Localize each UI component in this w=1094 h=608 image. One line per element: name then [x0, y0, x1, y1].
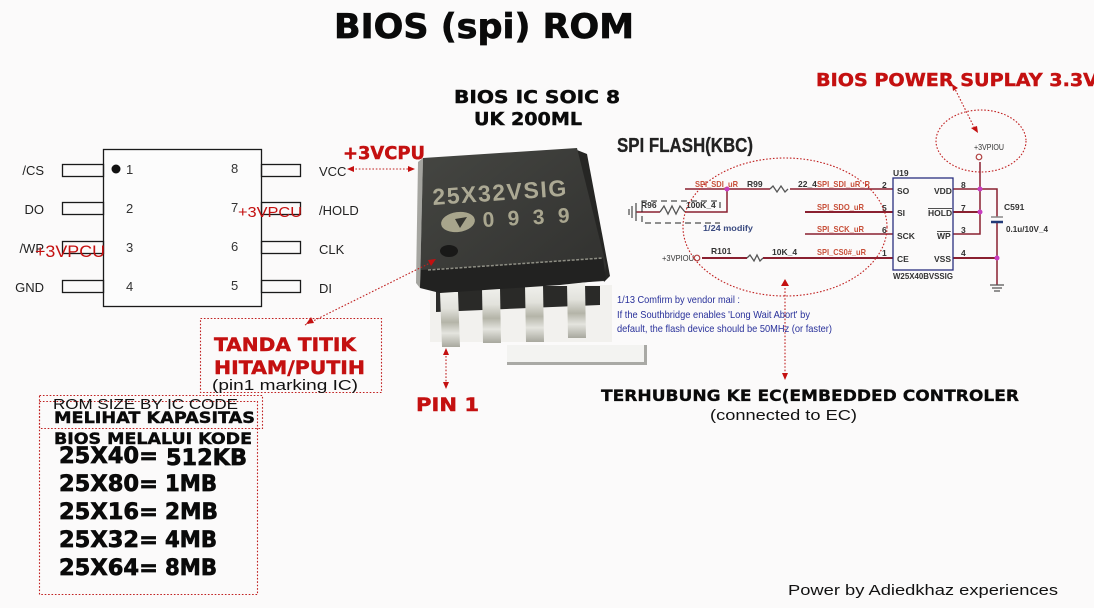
row 25X16: 2MB — [165, 500, 218, 525]
arrow: power supply — [952, 84, 978, 133]
chip side shadow — [577, 150, 610, 282]
U19 chip — [893, 178, 953, 270]
callout: pin 1 marking: HITAM/PUTIH — [214, 358, 365, 379]
chip photo illustration — [416, 148, 647, 365]
U19 pin names: HOLD — [928, 208, 952, 218]
pin numbers — [882, 180, 966, 258]
schematic title: SPI FLASH(KBC) — [617, 135, 753, 157]
row 25X32: 4MB — [165, 528, 217, 553]
Indonesian heading line 2: BIOS MELALUI KODE — [54, 429, 252, 448]
right pin names: VCC — [319, 164, 346, 179]
arrow: to EC — [781, 279, 789, 380]
+3VPCU label pin 3: +3VPCU — [35, 242, 105, 261]
pin 1 dot — [112, 164, 120, 174]
power net labels: +3VPIOU — [662, 254, 694, 263]
outer frame — [40, 402, 258, 594]
part labels: R96 — [641, 200, 657, 210]
pin numbers: 4 — [126, 279, 133, 294]
signal names — [695, 179, 870, 257]
part labels: R101 — [711, 246, 732, 256]
row 25X80: 25X80= — [59, 472, 158, 497]
pin numbers: 3 — [126, 240, 133, 255]
part labels: C591 — [1004, 202, 1025, 212]
PIN 1 label: PIN 1 — [416, 394, 479, 416]
resistors — [660, 186, 788, 261]
U19 pin names: CE — [897, 254, 909, 264]
U19 pin names — [897, 186, 952, 264]
row 25X16: 25X16= — [59, 500, 158, 525]
pin numbers: 5 — [231, 278, 238, 293]
arrow: VCC to chip — [347, 166, 415, 172]
power supply heading: BIOS POWER SUPLAY 3.3V — [816, 70, 1094, 91]
panel: SPI flash schematic — [617, 110, 1048, 335]
pin numbers: 7 — [231, 200, 238, 215]
left pin names: /CS — [22, 163, 44, 178]
power terminals — [694, 154, 982, 261]
chip pin 1 mark — [440, 245, 458, 257]
blue vendor note — [617, 294, 832, 335]
chip date code: 0939 — [482, 204, 570, 232]
EC caption — [601, 386, 1019, 424]
power net labels — [662, 143, 1004, 263]
pin numbers: 7 — [961, 203, 966, 213]
left pin names: GND — [15, 280, 44, 295]
part labels: U19 — [893, 168, 909, 178]
part labels: 10K_4 — [772, 247, 797, 257]
part labels: 100K_4 — [686, 200, 716, 210]
right pins — [262, 164, 300, 292]
U19 pin names: WP — [937, 231, 951, 241]
capacitor — [991, 216, 1003, 218]
+3VPCU label pin 7: +3VPCU — [238, 204, 302, 221]
pin numbers: 8 — [961, 180, 966, 190]
signal names: SPI_SDO_uR — [817, 202, 864, 212]
left pin names — [15, 163, 44, 295]
left pins — [62, 164, 104, 292]
part labels: W25X40BVSSIG — [893, 271, 953, 281]
EC caption: TERHUBUNG KE EC(EMBEDDED CONTROLER — [601, 386, 1019, 405]
row 25X40 — [59, 444, 247, 471]
EC caption: (connected to EC) — [710, 408, 857, 424]
dashed R96 box — [642, 201, 720, 223]
Indonesian heading line 1: MELIHAT KAPASITAS — [54, 408, 255, 427]
chip lower edge — [420, 258, 606, 293]
pin numbers — [126, 161, 238, 294]
row 25X80 — [59, 472, 217, 497]
photo shadow — [507, 345, 647, 365]
left pin names: /WP — [19, 241, 44, 256]
row 25X40: 512KB — [166, 446, 247, 471]
pin numbers: 4 — [961, 248, 966, 258]
row 25X32: 25X32= — [59, 528, 158, 553]
pin numbers: 6 — [882, 225, 887, 235]
arrow: pin 1 — [443, 348, 449, 389]
credit: Power by Adiedkhaz experiences — [788, 582, 1058, 599]
title: BIOS (spi) ROM — [334, 7, 634, 47]
U19 pin names: SCK — [897, 231, 916, 241]
right pin names — [319, 164, 359, 296]
row 25X64: 25X64= — [59, 556, 158, 581]
chip heading: BIOS IC SOIC 8 — [454, 87, 620, 108]
row 25X80: 1MB — [165, 472, 217, 497]
chip heading — [454, 87, 620, 130]
row 25X64: 8MB — [165, 556, 217, 581]
right pin names: DI — [319, 281, 332, 296]
ground left — [629, 203, 636, 221]
table heading: ROM SIZE BY IC CODE — [53, 396, 238, 413]
right pin names: CLK — [319, 242, 345, 257]
left pin names: DO — [24, 202, 44, 217]
U19 pin names: VDD — [934, 186, 952, 196]
IC package outline — [104, 150, 262, 306]
chip marking text: 25X32VSIG — [432, 175, 567, 210]
pin numbers: 5 — [882, 203, 887, 213]
row 25X64 — [59, 556, 217, 581]
row 25X40: 25X40= — [59, 444, 158, 469]
right pin names: /HOLD — [319, 203, 359, 218]
U19 pin names: SO — [897, 186, 910, 196]
blue vendor note: If the Southbridge enables 'Long Wait Abort' by — [617, 309, 811, 321]
+3VCPU label: +3VCPU — [343, 143, 425, 164]
ellipse highlight: power — [936, 110, 1026, 172]
photo white backing — [430, 285, 612, 342]
pin numbers: 1 — [882, 248, 887, 258]
pin numbers: 2 — [126, 201, 133, 216]
modify note: 1/24 modify — [703, 223, 753, 233]
header frame — [40, 396, 262, 428]
ground right — [990, 285, 1004, 291]
pin numbers: 8 — [231, 161, 238, 176]
power net labels: +3VPIOU — [974, 143, 1004, 152]
pin numbers: 6 — [231, 239, 238, 254]
part labels: 22_4 — [798, 179, 817, 189]
row 25X32 — [59, 528, 217, 553]
wires — [636, 162, 997, 285]
part labels: 0.1u/10V_4 — [1006, 224, 1048, 234]
signal names: SPI_SDI_uR — [695, 179, 738, 189]
ellipse highlight: SPI lines — [683, 158, 887, 296]
blue vendor note: 1/13 Comfirm by vendor mail : — [617, 294, 740, 306]
U19 pin names: SI — [897, 208, 905, 218]
signal names: SPI_SCK_uR — [817, 224, 864, 234]
panel: ROM size table — [40, 396, 262, 594]
callout: pin 1 marking: (pin1 marking IC) — [212, 378, 358, 394]
U19 pin names: VSS — [934, 254, 951, 264]
junction dots — [724, 186, 1000, 260]
part labels — [641, 168, 1048, 281]
pin numbers: 3 — [961, 225, 966, 235]
row 25X16 — [59, 500, 218, 525]
pin numbers: 2 — [882, 180, 887, 190]
chip logo — [440, 210, 476, 234]
chip body — [420, 148, 606, 292]
chip leads — [440, 283, 586, 347]
arrow: marking to chip dot — [305, 259, 436, 325]
callout: pin 1 marking — [200, 318, 382, 394]
part labels: R99 — [747, 179, 763, 189]
pin numbers: 1 — [126, 162, 133, 177]
signal names: SPI_SDI_uR_R — [817, 179, 870, 189]
callout: pin 1 marking: TANDA TITIK — [214, 335, 357, 356]
blue vendor note: default, the flash device should be 50MHz (or faster) — [617, 323, 832, 335]
shadow under body — [436, 286, 600, 312]
signal names: SPI_CS0#_uR — [817, 247, 866, 257]
chip heading: UK 200ML — [474, 109, 582, 130]
IC pinout diagram — [15, 150, 359, 306]
